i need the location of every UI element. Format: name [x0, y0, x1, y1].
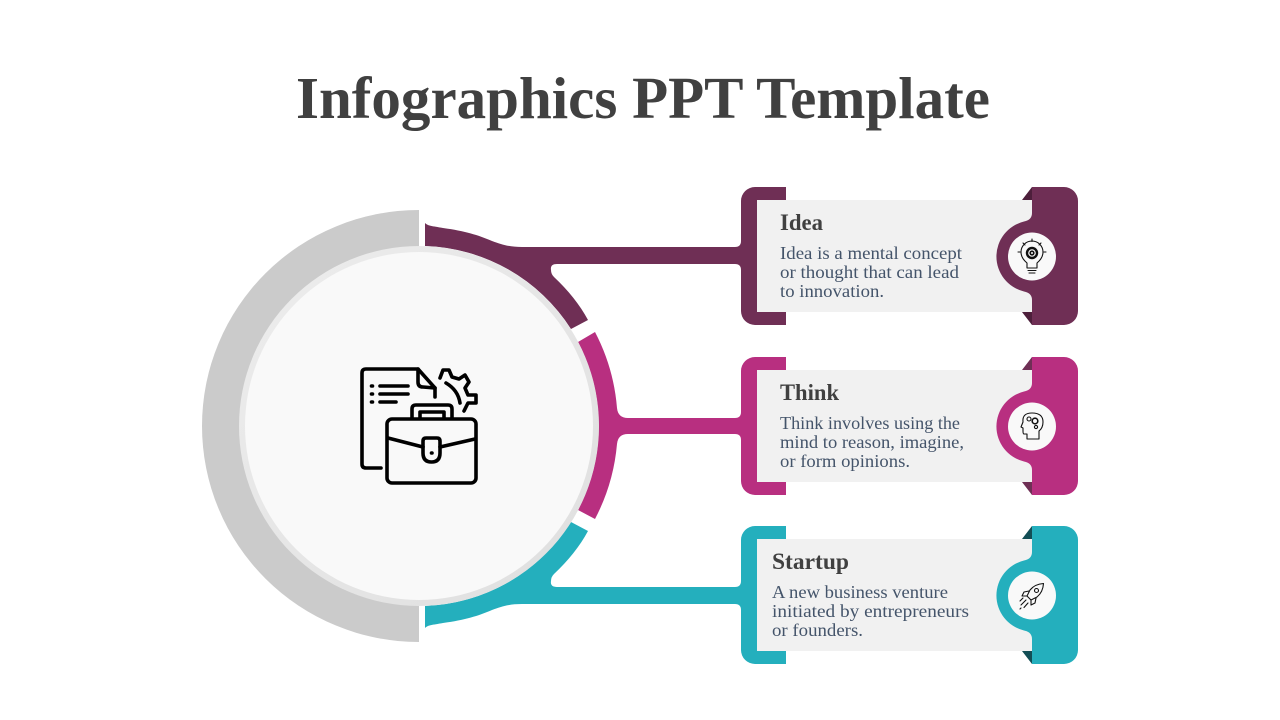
icon: light bulb — [1018, 239, 1046, 273]
icon circle — [1008, 402, 1056, 450]
right tab — [996, 357, 1078, 495]
description: Idea is a mental concept — [780, 243, 962, 263]
panel background — [757, 539, 1033, 651]
panel: startup — [741, 526, 1078, 664]
description — [772, 582, 969, 640]
left bracket — [741, 187, 786, 325]
description: A new business venture — [772, 582, 948, 602]
connector: idea — [425, 223, 741, 329]
description: or thought that can lead — [780, 262, 959, 282]
left bracket — [741, 526, 786, 664]
heading: Think — [780, 380, 839, 405]
connector: think — [578, 332, 741, 519]
panel: idea — [741, 187, 1078, 325]
title: Infographics PPT Template — [296, 65, 990, 131]
icon circle — [1008, 232, 1056, 280]
description: mind to reason, imagine, — [780, 432, 964, 452]
description: to innovation. — [780, 281, 884, 301]
fold triangles — [1022, 187, 1032, 325]
fold triangles — [1022, 357, 1032, 495]
icon: head with gears — [1021, 413, 1043, 439]
heading: Startup — [772, 549, 849, 574]
heading: Idea — [780, 210, 823, 235]
fold triangles — [1022, 526, 1032, 664]
description — [780, 243, 962, 301]
icon: rocket — [1020, 584, 1044, 609]
right tab — [996, 526, 1078, 664]
central circle — [239, 246, 599, 606]
description: or form opinions. — [780, 451, 910, 471]
left bracket — [741, 357, 786, 495]
panel: think — [741, 357, 1078, 495]
right tab — [996, 187, 1078, 325]
panel background — [757, 370, 1033, 482]
description: Think involves using the — [780, 413, 960, 433]
icon circle — [1008, 572, 1056, 620]
panel background — [757, 200, 1033, 312]
connector: startup — [425, 522, 741, 628]
description: or founders. — [772, 620, 863, 640]
description — [780, 413, 964, 471]
gray half ring — [202, 210, 419, 642]
description: initiated by entrepreneurs — [772, 601, 969, 621]
icon: document, gear and briefcase — [362, 369, 476, 483]
